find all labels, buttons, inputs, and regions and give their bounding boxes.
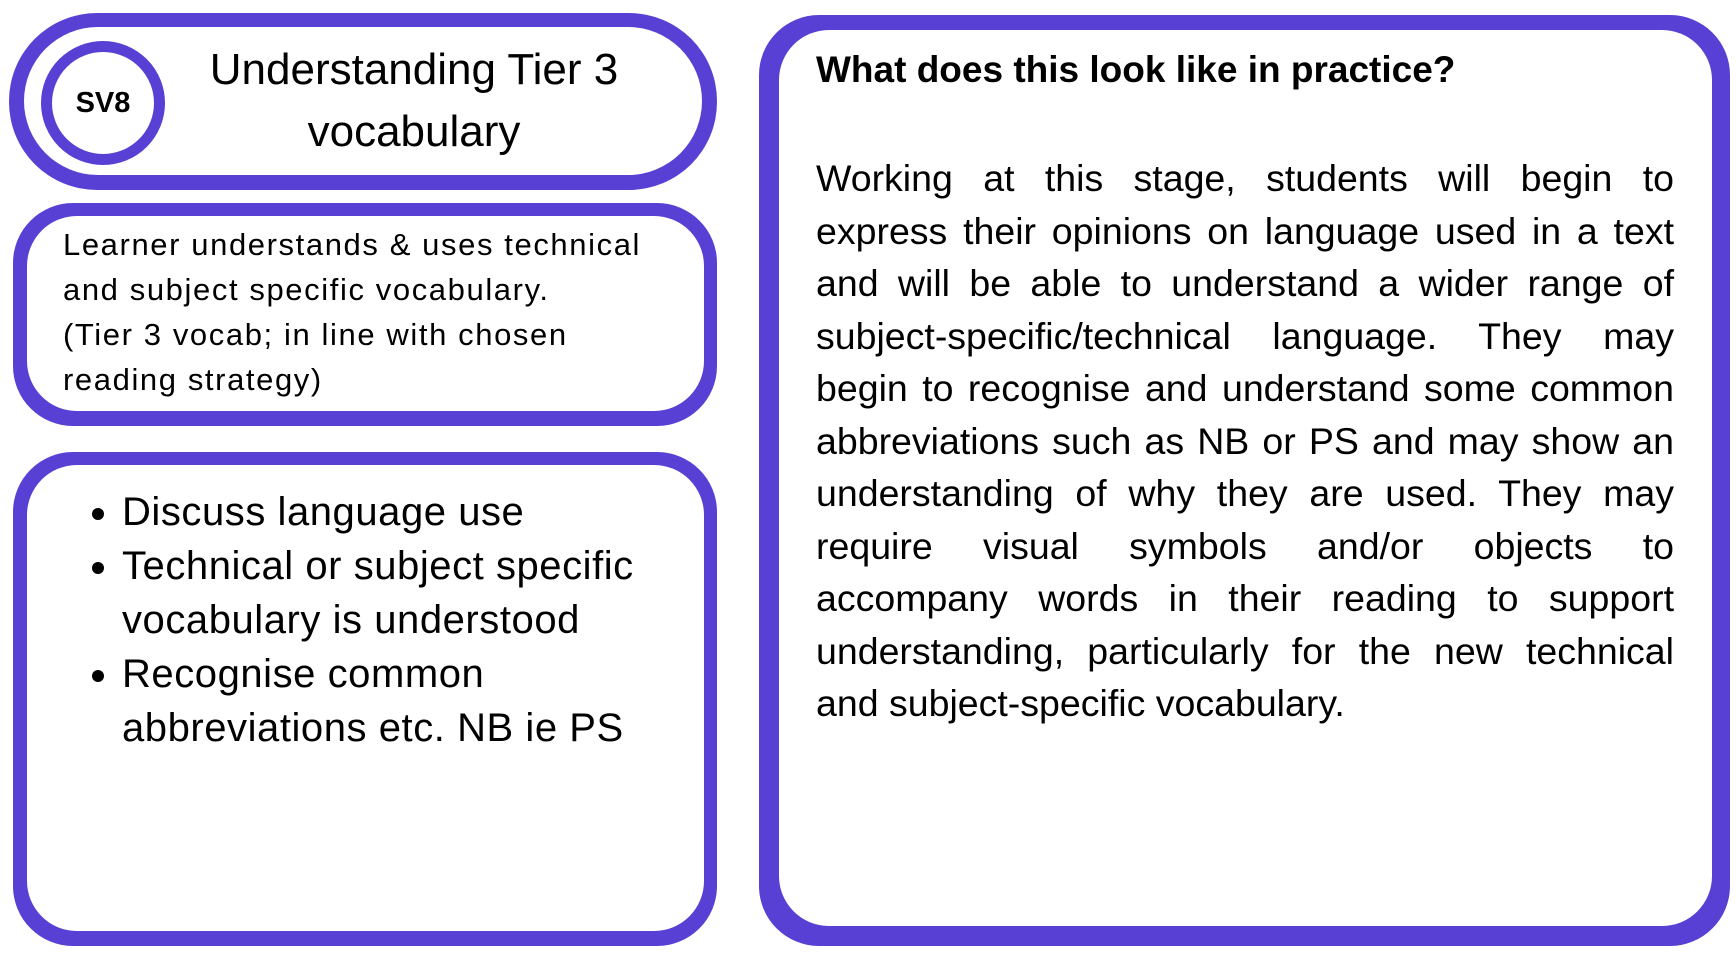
text block: learner description: [63, 227, 641, 397]
text block: learner description: and subject specific vocabulary.: [63, 272, 550, 307]
icon: SV8 badge: SV8: [76, 86, 130, 118]
heading: Understanding Tier 3 vocabulary: [210, 45, 618, 156]
panel: description: [13, 203, 717, 426]
panel: title: [9, 13, 717, 190]
list: key points: vocabulary is understood: [122, 598, 580, 642]
list: key points: [92, 490, 634, 750]
list: key points: abbreviations etc. NB ie PS: [122, 706, 624, 750]
panel: in practice: [759, 15, 1730, 946]
text block: learner description: (Tier 3 vocab; in line with chosen: [63, 317, 568, 352]
text block: practice description: Working at this stage, students will begin to express their opinions on language used in a text and will be able to understand a wider range of subject-specific/technical language. They may begin to recognise and understand some common abbreviations such as NB or PS and may show an understanding of why they are used. They may require visual symbols and/or objects to accompany words in their reading to support understanding, particularly for the new technical and subject-specific vocabulary.: [816, 157, 1674, 724]
icon: SV8 badge: [41, 41, 165, 165]
heading: Understanding Tier 3 vocabulary: Understanding Tier 3: [210, 45, 618, 94]
list: key points: Technical or subject specific: [122, 544, 634, 588]
heading: What does this look like in practice?: What does this look like in practice?: [816, 49, 1455, 90]
text block: learner description: Learner understands & uses technical: [63, 227, 641, 262]
panel: bullet list: [13, 452, 717, 946]
list: key points: Discuss language use: [122, 490, 524, 534]
list: key points: Recognise common: [122, 652, 484, 696]
heading: Understanding Tier 3 vocabulary: vocabulary: [308, 107, 520, 156]
text block: learner description: reading strategy): [63, 362, 323, 397]
